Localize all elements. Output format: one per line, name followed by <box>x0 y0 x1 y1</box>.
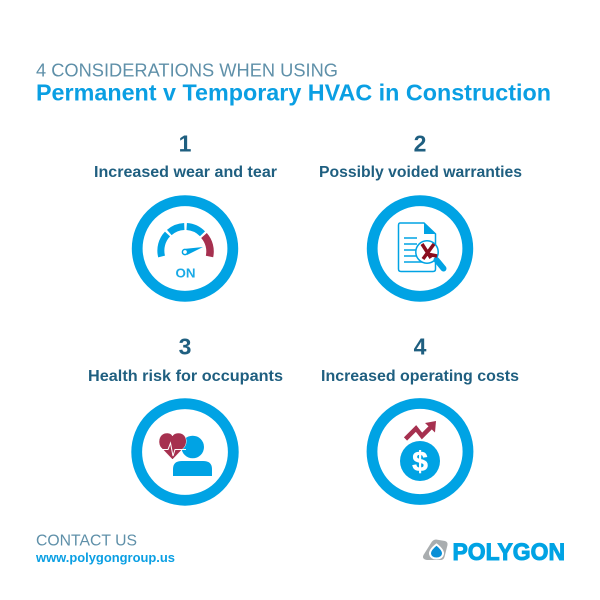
heading 2: Possibly voided warranties <box>319 164 522 181</box>
heading 3: Health risk for occupants <box>88 368 283 385</box>
website: www.polygongroup.us <box>35 551 175 565</box>
panel: consideration 3 <box>88 334 283 500</box>
heading 1: Increased wear and tear <box>94 164 277 181</box>
panel: consideration 4 <box>321 334 519 500</box>
number 2: 2 <box>414 130 426 156</box>
logo: Polygon <box>423 539 565 566</box>
icon: gauge: ON <box>176 266 196 280</box>
number 4: 4 <box>414 334 427 360</box>
icon: gauge <box>137 201 233 296</box>
icon: heart and person <box>137 404 233 500</box>
icon: dollar and rising arrow <box>372 404 468 500</box>
panel: consideration 1 <box>94 130 277 296</box>
title eyebrow: 4 CONSIDERATIONS WHEN USING <box>36 60 338 80</box>
icon: document with magnifier <box>372 201 468 296</box>
number 1: 1 <box>179 130 192 156</box>
heading 4: Increased operating costs <box>321 368 519 385</box>
logo wordmark: POLYGON <box>452 539 565 566</box>
contact label: CONTACT US <box>36 532 137 550</box>
title: Permanent v Temporary HVAC in Construction <box>36 80 551 106</box>
icon: dollar and rising arrow: $ <box>412 446 428 477</box>
number 3: 3 <box>179 334 191 360</box>
panel: consideration 2 <box>319 130 522 296</box>
